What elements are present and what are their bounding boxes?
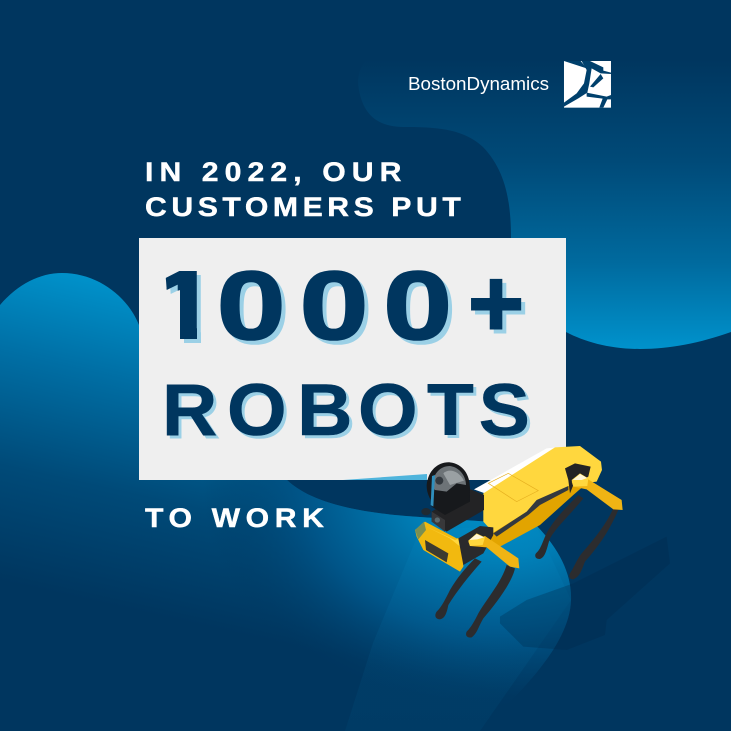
robot dog (415, 446, 623, 637)
nose window (425, 540, 448, 562)
logo wordmark: BostonDynamics (408, 73, 549, 94)
body: white top edge (474, 447, 557, 493)
word: ROBOTS: ROBOTS (162, 369, 530, 451)
heading: intro text: CUSTOMERS PUT (145, 193, 461, 223)
background shape: top right blue wave (358, 0, 731, 349)
olive sensor patch (415, 522, 426, 539)
logo mark (564, 61, 611, 108)
far legs (535, 495, 618, 579)
front hip (458, 526, 493, 565)
camera dome (427, 462, 470, 515)
logo: Boston Dynamics (408, 61, 611, 108)
number: 1000+: 1000 (150, 251, 452, 360)
near legs (435, 558, 515, 637)
card background (139, 238, 566, 480)
front upper leg (468, 536, 519, 568)
sensor knob (421, 508, 431, 515)
heading: intro text (145, 158, 461, 223)
body: side (490, 483, 587, 547)
robot shadow (500, 537, 670, 650)
front nose (415, 522, 463, 572)
number: 1000+ (166, 270, 526, 345)
rear hip (565, 463, 591, 493)
rear upper leg (572, 479, 623, 510)
light blue sliver on card edge (343, 474, 427, 480)
body: hatch panel (488, 473, 538, 502)
number: 1000+: + (468, 250, 524, 357)
body: side stripe (493, 486, 568, 537)
text: to work: TO WORK (145, 504, 324, 534)
panel: headline card (139, 238, 566, 480)
sensor box (432, 488, 484, 532)
heading: intro text: IN 2022, OUR (145, 158, 402, 188)
background shape: lower left and centre blue wave (0, 273, 571, 698)
body: top surface (483, 446, 602, 533)
